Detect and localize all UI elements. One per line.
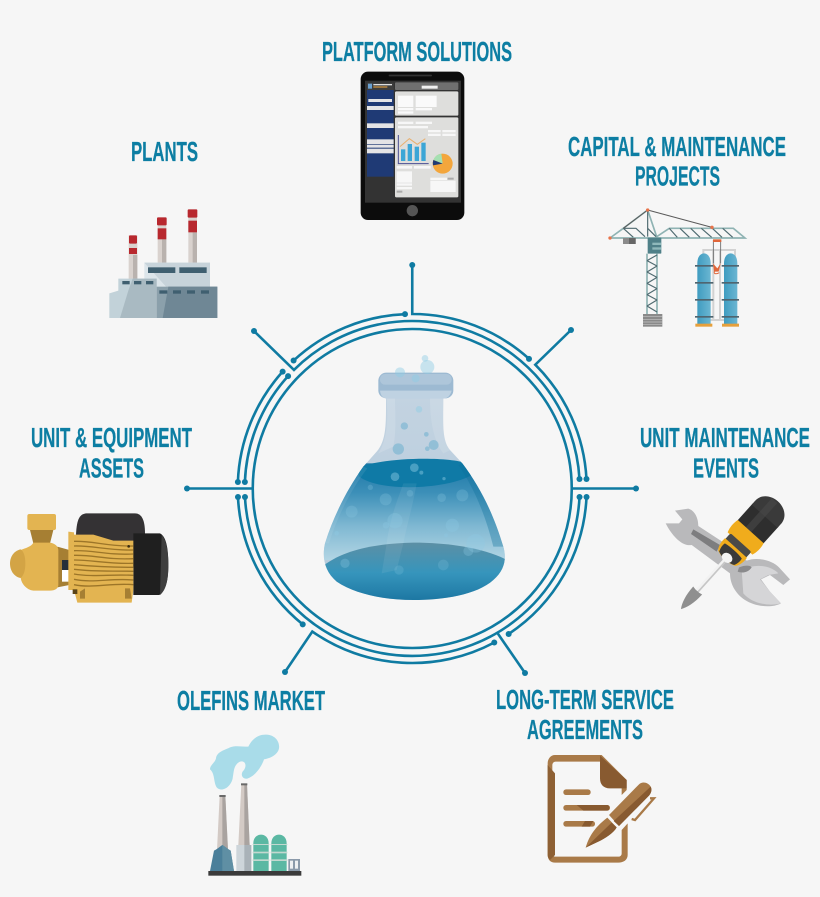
circuit ring with spokes [184, 262, 639, 676]
icon: tablet dashboard [361, 72, 464, 220]
heading: long-term service agreements [496, 684, 674, 745]
heading: unit and equipment assets: UNIT & EQUIPMENT [31, 422, 192, 453]
heading: unit maintenance events: EVENTS [693, 452, 759, 484]
heading: unit and equipment assets: ASSETS [79, 452, 144, 484]
icon: water pump [10, 513, 168, 603]
heading: capital and maintenance projects [568, 131, 786, 192]
icon: olefins plant with smoke [208, 735, 301, 876]
heading: capital and maintenance projects: PROJECTS [635, 160, 720, 192]
icon: wrench and screwdriver [666, 489, 792, 621]
heading: unit and equipment assets [31, 422, 192, 484]
icon: central flask [320, 355, 510, 603]
heading: unit maintenance events [640, 422, 810, 484]
heading: long-term service agreements: LONG-TERM SERVICE [496, 684, 674, 715]
heading: long-term service agreements: AGREEMENTS [527, 714, 643, 745]
icon: tower crane and columns [608, 208, 745, 327]
icon: plants factory [109, 209, 217, 318]
heading: olefins market: OLEFINS MARKET [177, 685, 325, 716]
heading: plants: PLANTS [131, 136, 198, 167]
heading: platform solutions: PLATFORM SOLUTIONS [322, 36, 512, 67]
icon: agreement document and pen [548, 755, 654, 863]
